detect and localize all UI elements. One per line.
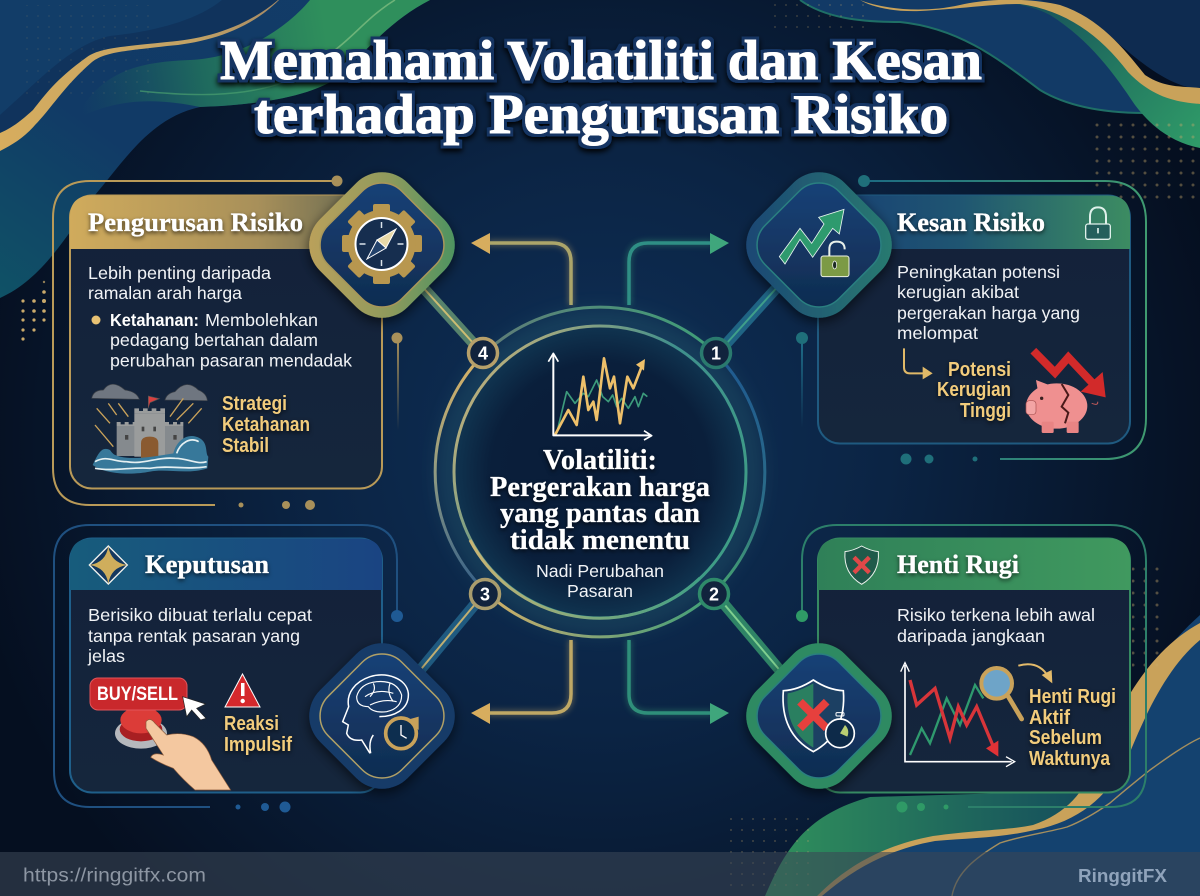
badge 1: [702, 338, 730, 368]
badge 4: 4: [478, 344, 488, 364]
icon: gear compass diamond: [294, 157, 470, 333]
text block: [87, 605, 312, 666]
text block: ramalan arah harga: [88, 283, 242, 303]
badge 4: [468, 338, 498, 368]
callout: Waktunya: [1029, 747, 1110, 770]
text block: jelas: [87, 646, 125, 666]
badge 1: 1: [711, 344, 721, 364]
top-left wave decoration: [0, 0, 430, 298]
callout: Strategi: [222, 392, 287, 415]
hub subheading: Nadi Perubahan: [536, 561, 664, 581]
badge 2: [700, 580, 728, 608]
text block: Risiko terkena lebih awal: [897, 605, 1095, 625]
hub subheading: [536, 561, 664, 601]
icon: zigzag arrow and unlocked padlock diamond: [731, 157, 907, 333]
icon: buy/sell button with hand: BUY/SELL: [97, 684, 178, 705]
text block: Lebih penting daripada: [88, 263, 271, 283]
text block: perubahan pasaran mendadak: [110, 350, 352, 370]
callout: Tinggi: [960, 399, 1011, 422]
connector lines from hub to diamonds: [410, 273, 790, 680]
top-right wave decoration: [800, 0, 1200, 148]
text block: Membolehkan: [205, 310, 318, 330]
text block: pergerakan harga yang: [897, 303, 1080, 323]
heading: Keputusan: [145, 550, 270, 579]
icon: bent gold arrow: [904, 348, 933, 379]
text block: [88, 263, 352, 370]
callout: [1029, 685, 1116, 770]
chart: falling price with magnifier: [901, 663, 1052, 767]
callout: Henti Rugi: [1029, 685, 1116, 708]
icon: header padlock: [1086, 207, 1110, 239]
icon: castle in storm: [92, 384, 208, 474]
callout: [937, 358, 1011, 422]
callout: Kerugian: [937, 378, 1011, 401]
callout: Stabil: [222, 434, 269, 457]
arrow: gold top-left: [471, 233, 571, 305]
brand name: RinggitFX: [1078, 866, 1167, 886]
text block: Peningkatan potensi: [897, 262, 1060, 282]
hub heading: yang pantas dan: [500, 498, 700, 529]
text block: [897, 262, 1080, 343]
text block: melompat: [897, 323, 978, 343]
volatility chart icon: [548, 353, 652, 440]
panel: Pengurusan Risiko: [53, 176, 402, 510]
icon: warning triangle: [225, 674, 260, 707]
hub heading: tidak menentu: [510, 525, 690, 556]
icon: brain and clock diamond: [294, 628, 470, 804]
panel: Kesan Risiko: [796, 175, 1146, 464]
arrow: gold bottom-left: [471, 640, 571, 724]
badge 3: [470, 580, 500, 608]
callout: Ketahanan: [222, 413, 310, 436]
text block: tanpa rentak pasaran yang: [88, 626, 300, 646]
callout: Aktif: [1029, 706, 1070, 729]
callout: Reaksi: [224, 712, 279, 735]
text block: pedagang bertahan dalam: [110, 330, 318, 350]
website url: https://ringgitfx.com: [23, 866, 206, 886]
arrow: green bottom-right: [629, 640, 729, 724]
central hub: [435, 307, 765, 637]
heading: Henti Rugi: [897, 550, 1019, 579]
badge 3: 3: [480, 584, 490, 604]
heading: Kesan Risiko: [897, 208, 1045, 237]
footer bar: [0, 852, 1200, 896]
icon: shield and stopwatch diamond: [731, 628, 907, 804]
callout: Sebelum: [1029, 726, 1102, 749]
title: [220, 30, 982, 146]
icon: header shield: [845, 546, 878, 584]
panel: Keputusan: [54, 525, 403, 812]
text block: kerugian akibat: [897, 282, 1019, 302]
callout: [222, 392, 310, 457]
icon: broken piggy bank with falling arrow: [1026, 351, 1106, 433]
text block: Ketahanan:: [110, 310, 199, 330]
callout: [224, 712, 292, 756]
title: terhadap Pengurusan Risiko: [254, 84, 948, 146]
arrow: green top-right: [629, 233, 729, 305]
hub heading: Pergerakan harga: [490, 472, 710, 503]
hub heading: Volatiliti:: [543, 445, 657, 476]
text block: [897, 605, 1095, 646]
badge 2: 2: [709, 584, 719, 604]
panel: Henti Rugi: [796, 525, 1146, 812]
text block: daripada jangkaan: [897, 626, 1045, 646]
title: Memahami Volatiliti dan Kesan: [220, 30, 982, 92]
callout: Potensi: [948, 358, 1011, 381]
hub subheading: Pasaran: [567, 581, 633, 601]
icon: gold diamond: [89, 546, 127, 584]
hub heading: [490, 445, 710, 556]
icon: buy/sell button with hand: [90, 678, 231, 790]
callout: Impulsif: [224, 733, 292, 756]
bottom-right wave decoration: [765, 615, 1200, 896]
heading: Pengurusan Risiko: [88, 208, 303, 237]
text block: Berisiko dibuat terlalu cepat: [88, 605, 312, 625]
